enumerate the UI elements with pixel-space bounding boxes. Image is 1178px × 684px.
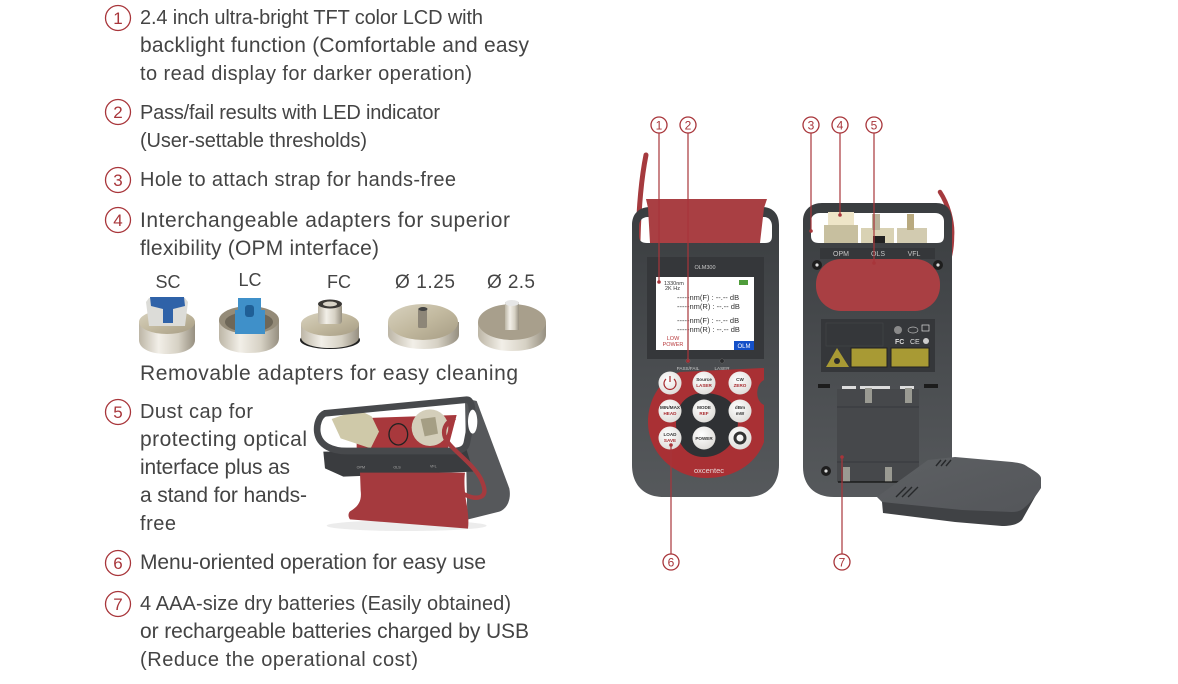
screen: -----nm(R) : --.-- dB: [677, 302, 740, 311]
adapter: 2.5 mm: Ø 2.5: [487, 272, 535, 293]
callout 7: 7: [839, 556, 846, 570]
keypad buttons: REF: [699, 411, 709, 416]
callout 2: [680, 117, 696, 363]
battery lid: [877, 457, 1041, 526]
keypad buttons: LOAD: [663, 432, 677, 437]
callout 5: 5: [871, 118, 878, 132]
feature 7: [106, 592, 529, 671]
keypad buttons: LASER: [696, 383, 712, 388]
adapter: SC: [139, 272, 195, 354]
callout 6: [663, 443, 679, 570]
indicators: [677, 359, 730, 371]
callout 5: [866, 117, 882, 265]
adapter: LC: [219, 270, 279, 353]
feature 5: protecting optical: [140, 428, 307, 451]
keypad buttons: MIN/MAX: [660, 405, 681, 410]
feature 5: free: [140, 513, 176, 535]
display bezel: [647, 257, 764, 359]
port labels: OLS: [871, 251, 885, 258]
feature 3: 3: [113, 171, 123, 190]
keypad buttons: POWER: [695, 436, 713, 441]
screen: -----nm(F) : --.-- dB: [677, 316, 739, 325]
keypad buttons: SAVE: [664, 438, 676, 443]
feature 2: (User-settable thresholds): [140, 130, 367, 152]
regulatory label: FC: [895, 339, 904, 346]
screen: [656, 277, 754, 350]
keypad buttons: dBm: [735, 405, 745, 410]
callout 1: [651, 117, 667, 284]
photo: dust cap used as a stand: OPM: [357, 465, 365, 469]
adapter: FC: [300, 272, 360, 349]
adapter caption: Removable adapters for easy cleaning: [140, 362, 518, 385]
port labels: VFL: [908, 251, 921, 258]
device: front view: [632, 155, 779, 497]
feature 1: to read display for darker operation): [140, 63, 472, 85]
strap: [638, 155, 646, 240]
keypad buttons: [658, 372, 752, 450]
feature 4: 4: [113, 211, 123, 230]
port labels: OPM: [833, 251, 849, 258]
callout 4: [832, 117, 848, 217]
front body: [632, 207, 779, 497]
callout 7: [834, 455, 850, 570]
feature 5: [106, 400, 307, 535]
keypad panel: [648, 368, 764, 478]
callout 1: 1: [656, 118, 663, 132]
feature 2: Pass/fail results with LED indicator: [140, 102, 440, 124]
callout 3: [803, 117, 819, 233]
keypad buttons: mW: [736, 411, 745, 416]
connectors: [824, 212, 927, 243]
screen: -----nm(F) : --.-- dB: [677, 293, 739, 302]
feature 3: Hole to attach strap for hands-free: [140, 169, 456, 191]
device: back view: [803, 192, 1041, 526]
feature 5: a stand for hands-: [140, 484, 307, 507]
keypad buttons: HEAD: [663, 411, 677, 416]
keypad buttons: MODE: [697, 405, 711, 410]
brand logo: oxcentec: [694, 466, 724, 475]
keypad buttons: ZERO: [734, 383, 747, 388]
feature 1: backlight function (Comfortable and easy: [140, 34, 530, 57]
feature 7: (Reduce the operational cost): [140, 649, 418, 671]
red dust cap: [816, 259, 940, 311]
regulatory label: [821, 319, 935, 372]
callout 2: 2: [685, 118, 692, 132]
callout 6: 6: [668, 556, 675, 570]
photo: dust cap used as a stand: OLS: [393, 465, 401, 469]
feature 1: 2.4 inch ultra-bright TFT color LCD with: [140, 7, 483, 29]
screws: [812, 260, 943, 476]
screen: 1330nm: [664, 281, 684, 287]
battery compartment: [818, 384, 938, 482]
feature list: [106, 6, 546, 671]
adapter: 1.25 mm: [388, 272, 459, 349]
feature 2: [106, 100, 440, 152]
back strap: [935, 192, 952, 279]
back body: [803, 203, 952, 497]
feature 5: 5: [113, 403, 123, 422]
screen: 2K Hz: [665, 286, 680, 292]
adapter: FC: FC: [327, 272, 351, 292]
feature 7: 7: [113, 595, 123, 614]
screen: POWER: [663, 342, 683, 348]
adapter: SC: SC: [155, 272, 181, 292]
adapter: 2.5 mm: [478, 272, 546, 351]
model label: OLM300: [694, 265, 716, 271]
indicators: LASER: [714, 366, 730, 371]
feature 4: flexibility (OPM interface): [140, 237, 379, 260]
indicators: PASS/FAIL: [677, 366, 700, 371]
feature 7: 4 AAA-size dry batteries (Easily obtained): [140, 593, 511, 615]
callouts: [651, 117, 882, 570]
feature 7: or rechargeable batteries charged by USB: [140, 620, 529, 643]
screen: OLM: [737, 344, 751, 350]
regulatory label: CE: [910, 339, 920, 346]
feature 4: Interchangeable adapters for superior: [140, 209, 510, 232]
port labels: [820, 248, 935, 259]
keypad buttons: CW: [736, 377, 744, 382]
red dust cap: [646, 199, 767, 243]
feature 1: [106, 6, 530, 85]
keypad buttons: Source: [696, 377, 712, 382]
feature 6: Menu-oriented operation for easy use: [140, 551, 486, 574]
feature 2: 2: [113, 103, 123, 122]
feature 5: Dust cap for: [140, 401, 253, 423]
callout 3: 3: [808, 118, 815, 132]
feature 6: 6: [113, 554, 123, 573]
feature 1: 1: [113, 9, 123, 28]
feature 4: [106, 208, 510, 260]
screen: LOW: [667, 336, 680, 342]
photo: dust cap used as a stand: VFL: [430, 465, 437, 469]
callout 4: 4: [837, 118, 844, 132]
feature 5: interface plus as: [140, 456, 290, 479]
adapter: LC: LC: [238, 270, 262, 290]
adapter: 1.25 mm: Ø 1.25: [395, 272, 455, 293]
screen: -----nm(R) : --.-- dB: [677, 325, 740, 334]
photo: dust cap used as a stand: [317, 398, 510, 531]
